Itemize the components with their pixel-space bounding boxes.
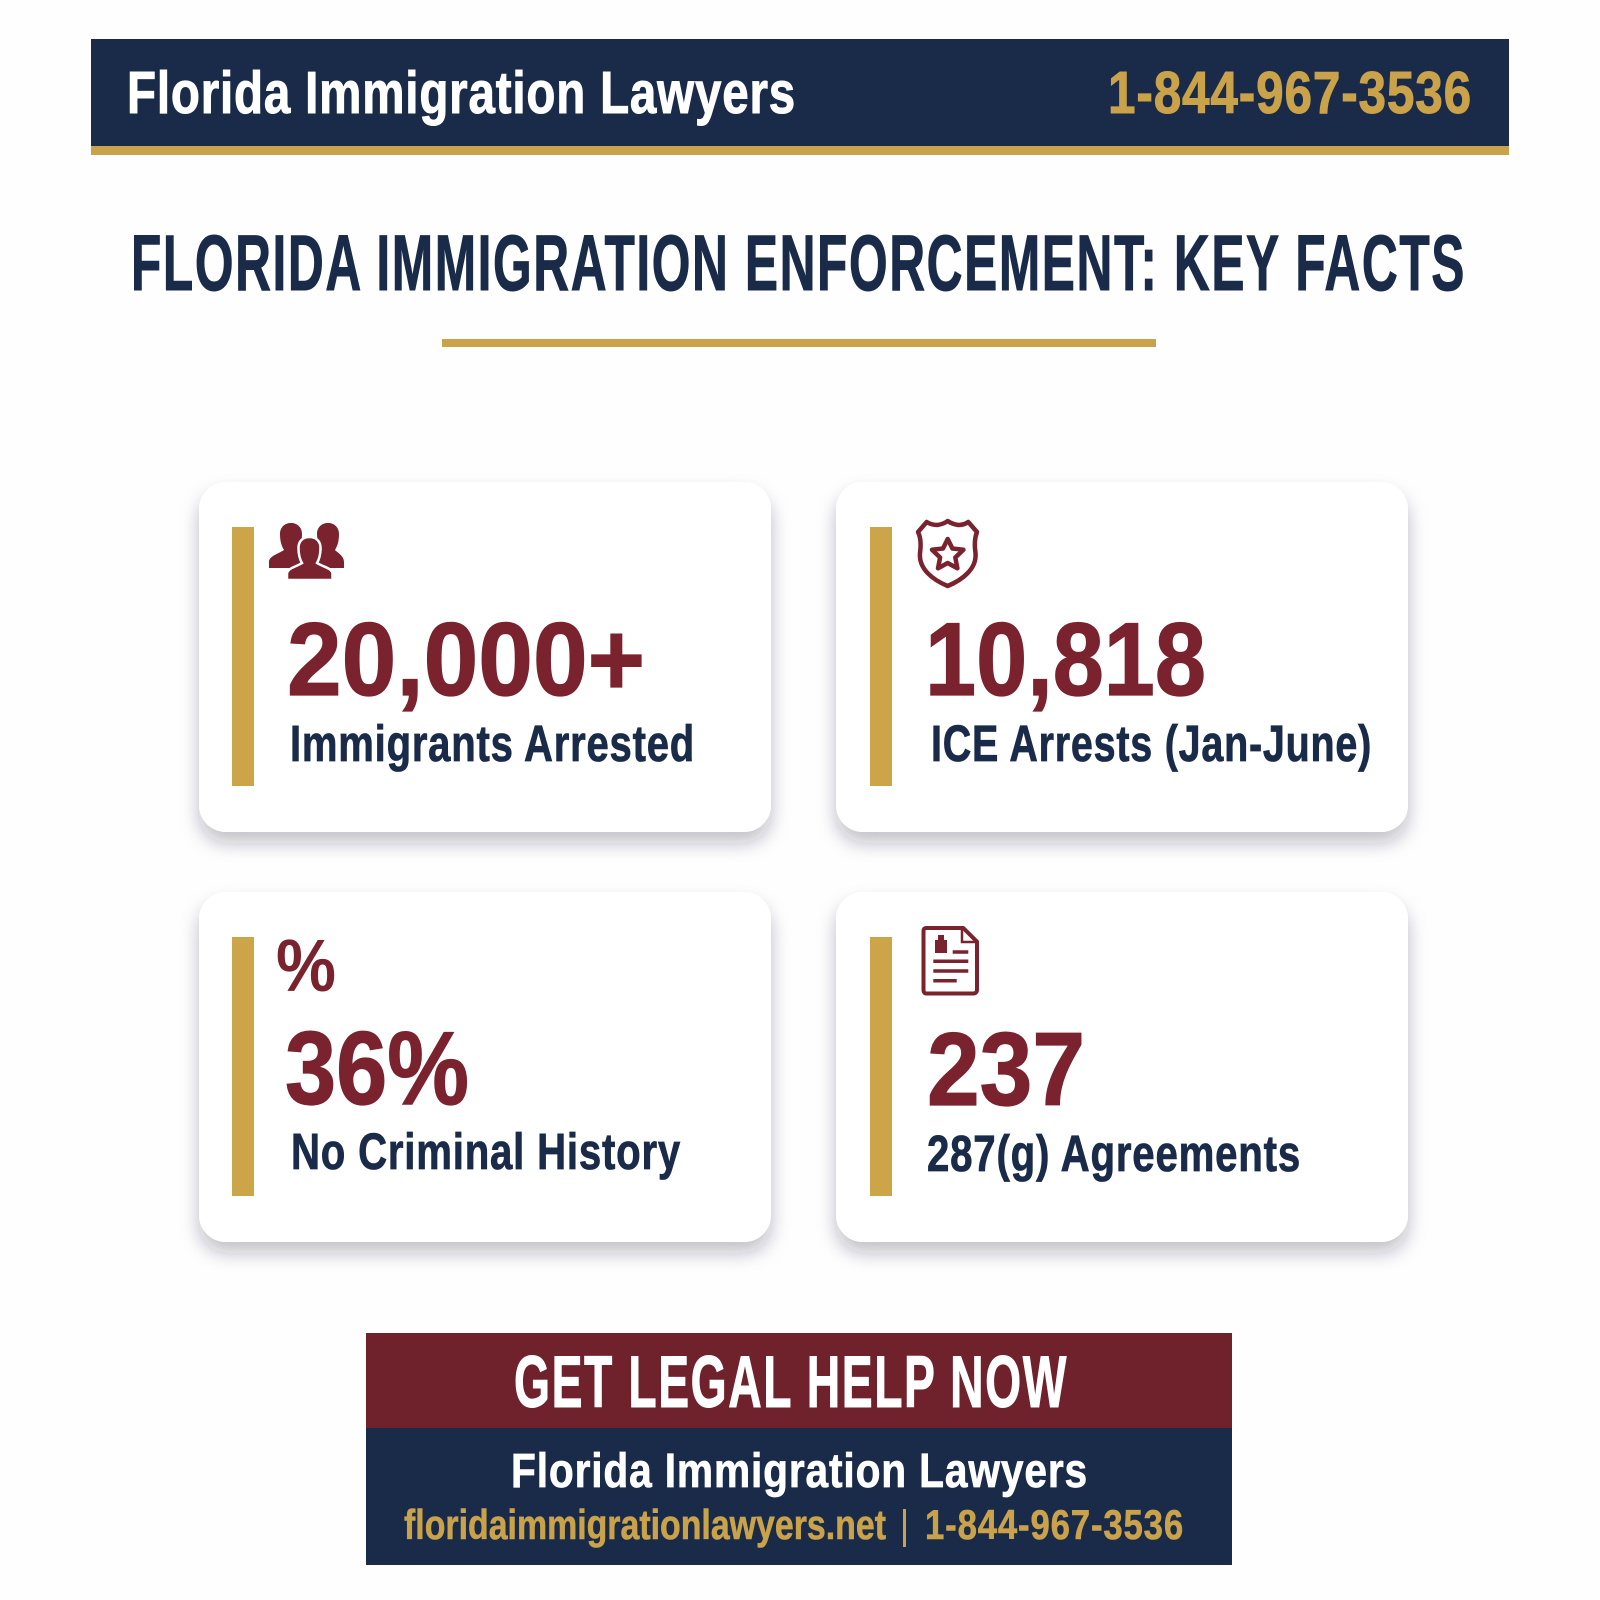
CTA contact details xyxy=(366,1428,1232,1565)
firm name: Florida Immigration Lawyers xyxy=(127,60,796,126)
header bar xyxy=(91,39,1509,155)
icon: group of people xyxy=(269,523,344,580)
icon: document xyxy=(924,928,977,994)
label: immigrants arrested: Immigrants Arrested xyxy=(290,715,695,772)
icon: percent sign: % xyxy=(276,924,336,1007)
stat: 20,000+: 20,000+ xyxy=(287,602,645,718)
phone number: 1-844-967-3536 xyxy=(1108,60,1472,126)
panel: ICE arrests xyxy=(836,482,1408,832)
CTA banner xyxy=(366,1333,1232,1428)
call to action box xyxy=(366,1333,1232,1565)
panel: no criminal history xyxy=(199,892,771,1242)
panel: 287(g) agreements xyxy=(836,892,1408,1242)
title underline xyxy=(442,339,1156,347)
CTA banner: GET LEGAL HELP NOW xyxy=(514,1342,1068,1423)
phone number: 1-844-967-3536 xyxy=(925,1501,1184,1548)
stat: 36%: 36% xyxy=(285,1011,469,1127)
website: floridaimmigrationlawyers.net xyxy=(404,1501,886,1548)
separator xyxy=(903,1509,906,1547)
stat: 10,818: 10,818 xyxy=(925,602,1206,718)
stat: 237: 237 xyxy=(927,1012,1085,1128)
label: ICE arrests: ICE Arrests (Jan-June) xyxy=(931,715,1372,772)
label: 287(g) agreements: 287(g) Agreements xyxy=(927,1125,1301,1182)
label: no criminal history: No Criminal History xyxy=(291,1123,681,1180)
firm name: Florida Immigration Lawyers xyxy=(511,1445,1088,1498)
icon: police badge xyxy=(918,521,977,586)
panel: immigrants arrested xyxy=(199,482,771,832)
